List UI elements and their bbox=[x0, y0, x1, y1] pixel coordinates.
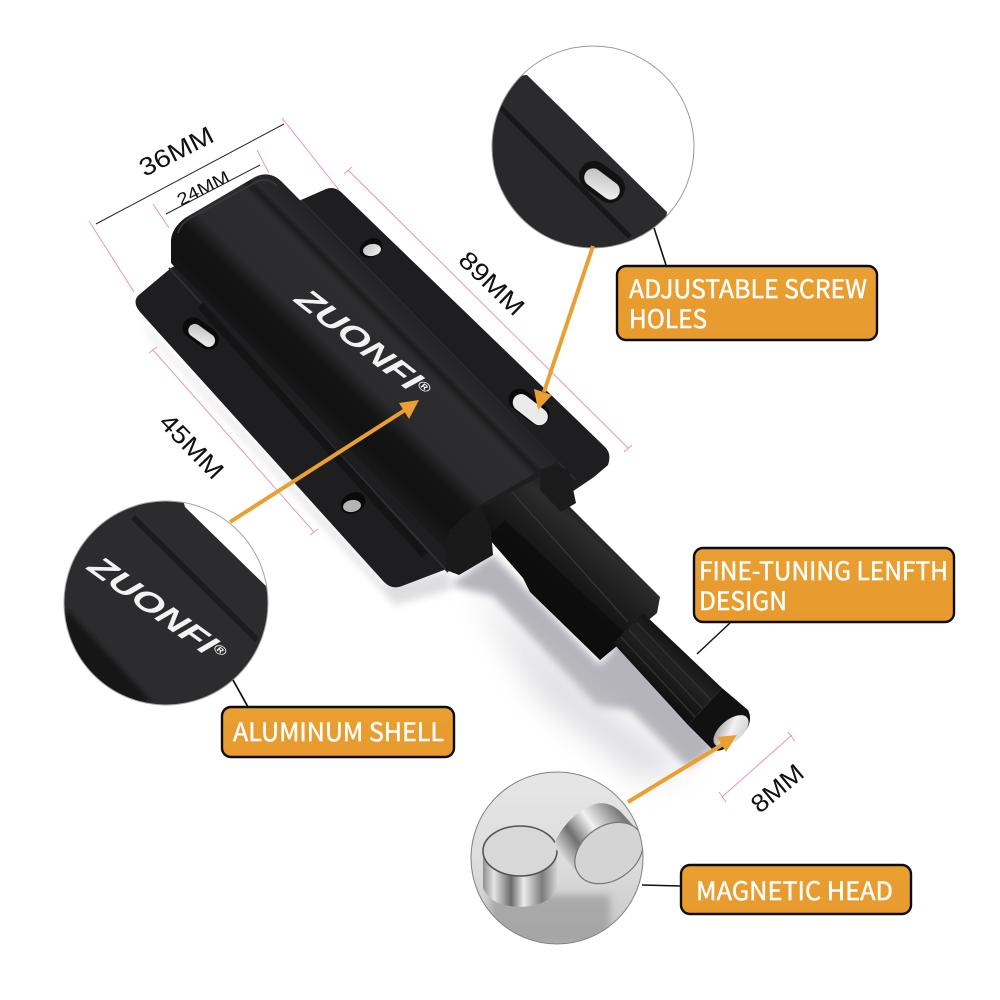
callout: adjustable screw holes bbox=[617, 266, 877, 340]
callout: aluminum shell bbox=[222, 707, 454, 757]
mounting plate bbox=[136, 188, 609, 587]
aluminum body bbox=[171, 174, 559, 552]
callout: magnetic head bbox=[681, 865, 911, 914]
rod tip bbox=[688, 688, 750, 751]
callout: aluminum shell: ALUMINUM SHELL bbox=[233, 713, 444, 749]
callout: adjustable screw holes: HOLES bbox=[629, 300, 707, 336]
callout circle: screw hole detail bbox=[492, 46, 694, 248]
ribbed rod bbox=[613, 613, 722, 725]
mounting holes bbox=[178, 234, 554, 518]
dimension lines bbox=[89, 118, 795, 802]
arrow: to logo body bbox=[230, 400, 419, 522]
end cap left bbox=[446, 505, 493, 575]
shadow beneath latch bbox=[140, 320, 715, 780]
leader line: aluminum shell bbox=[233, 680, 248, 707]
label: 45MM: 45MM bbox=[153, 408, 229, 485]
callout: fine-tuning length design: FINE-TUNING LENFTH bbox=[699, 552, 948, 588]
callout: fine-tuning length design: DESIGN bbox=[699, 582, 787, 618]
brand logo: ZUONFI bbox=[288, 283, 400, 374]
callout: fine-tuning length design bbox=[694, 548, 954, 622]
label: 24MM: 24MM bbox=[174, 167, 232, 210]
arrow: to screw hole bbox=[534, 246, 593, 410]
label: 8MM: 8MM bbox=[746, 759, 810, 819]
body end highlight bbox=[178, 180, 277, 233]
leader line: length design bbox=[697, 623, 730, 654]
end cap right bbox=[540, 466, 576, 512]
callout circle: magnets bbox=[471, 772, 655, 945]
brand logo: ® bbox=[414, 378, 435, 396]
shell logo: ® bbox=[210, 641, 231, 659]
callout: magnetic head: MAGNETIC HEAD bbox=[696, 872, 893, 908]
arrow: to magnetic head bbox=[628, 735, 737, 802]
product: magnetic push latch bbox=[136, 174, 754, 780]
leader line: magnetic head bbox=[642, 885, 681, 886]
leader line: screw holes bbox=[654, 228, 666, 265]
shell logo: ZUONFI bbox=[81, 551, 195, 639]
label: 36MM: 36MM bbox=[134, 121, 218, 183]
magnet tip bbox=[708, 709, 754, 753]
callout circle: aluminum shell logo detail bbox=[64, 500, 268, 706]
label: 89MM: 89MM bbox=[453, 246, 530, 322]
callout: adjustable screw holes: ADJUSTABLE SCREW bbox=[629, 270, 867, 306]
sliding inner block bbox=[482, 477, 660, 660]
